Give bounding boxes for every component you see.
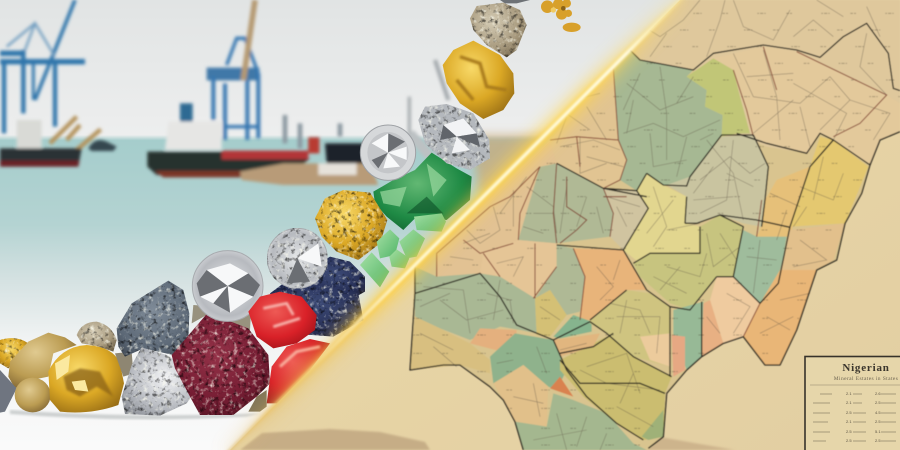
gold flakes bbox=[541, 0, 581, 32]
legend title: Nigerian bbox=[842, 362, 890, 374]
silver wedge: left edge bbox=[0, 370, 17, 413]
region: lime bbox=[687, 58, 750, 137]
legend rows: 2.1 bbox=[846, 400, 852, 405]
region: pale yellow bbox=[623, 173, 700, 263]
region: pink bbox=[672, 335, 685, 377]
borders: dark major bbox=[410, 23, 900, 450]
borders: red-brown bbox=[437, 47, 887, 337]
glow: wide halo bbox=[227, 0, 683, 450]
region: yellow east bbox=[790, 137, 868, 227]
stone: maroon bbox=[172, 314, 270, 415]
diagonal golden glow bbox=[227, 0, 683, 450]
stone: grey sliver top bbox=[500, 0, 530, 3]
diamond: speckled upper bbox=[418, 104, 490, 170]
region: orange centre bbox=[573, 248, 647, 320]
legend rows: 4.5 bbox=[875, 410, 881, 415]
legend rows: 2.5 bbox=[846, 410, 852, 415]
gold nugget: large bbox=[48, 345, 124, 412]
region: yellow green bbox=[590, 290, 670, 367]
stone: small brown bbox=[77, 322, 117, 352]
hills: bottom sepia bbox=[240, 429, 735, 450]
legend divider bbox=[810, 384, 900, 386]
ship: centre hull bbox=[147, 103, 378, 185]
map of regions bbox=[410, 0, 900, 450]
region: green west bbox=[415, 267, 537, 340]
legend rows bbox=[813, 391, 896, 443]
legend rows: 5.1 bbox=[875, 429, 881, 434]
emerald crystal: small bbox=[389, 249, 409, 268]
legend rows: 2.1 bbox=[846, 391, 852, 396]
emerald crystal: bottom bbox=[360, 252, 389, 287]
crane: centre blue and tan bbox=[207, 0, 260, 140]
region: teal east bbox=[733, 230, 787, 303]
region: teal patch bbox=[553, 315, 592, 338]
region: orange south-west bbox=[470, 328, 516, 350]
tan nugget: left bbox=[8, 333, 77, 388]
minerals: upper group bbox=[267, 0, 581, 288]
region: olive centre bbox=[633, 215, 743, 310]
region: olive south bbox=[560, 333, 672, 440]
region: green north bbox=[613, 50, 723, 191]
region: green south bbox=[515, 393, 647, 450]
legend rows: 2.5 bbox=[846, 438, 852, 443]
gold nugget: lower bbox=[315, 190, 387, 260]
legend rows: 2.6 bbox=[875, 391, 881, 396]
minerals: lower group bbox=[0, 251, 330, 419]
region: tan north-west bbox=[568, 148, 576, 162]
stone: red upper bbox=[248, 292, 317, 348]
gold nugget: top bbox=[443, 41, 514, 119]
ship: left hull bbox=[0, 117, 117, 167]
legend rows: 2.5 bbox=[846, 429, 852, 434]
glow: mid band bbox=[227, 0, 683, 450]
haze: warm distant shore bbox=[470, 129, 542, 193]
region: tan coast bbox=[494, 365, 548, 422]
legend rows: 2.5 bbox=[875, 400, 881, 405]
navy rocks bbox=[270, 257, 365, 337]
paper bbox=[230, 0, 900, 450]
legend rows: 2.5 bbox=[875, 419, 881, 424]
map base bbox=[412, 71, 870, 450]
diamond: top of navy bbox=[267, 228, 327, 288]
region: teal south bbox=[673, 302, 703, 370]
region: amber bbox=[757, 167, 810, 237]
stone: blue grey bbox=[117, 281, 189, 357]
region: grey beige bbox=[603, 188, 648, 250]
nugget: small round bbox=[15, 378, 51, 412]
stone: silver white bbox=[122, 347, 201, 416]
region: peach north-west bbox=[438, 152, 556, 276]
region: peach centre-west bbox=[480, 240, 557, 298]
region: yellow small bbox=[535, 290, 567, 337]
roads: thin network bbox=[420, 0, 890, 450]
region: red-orange bbox=[550, 377, 573, 397]
stone: tan top bbox=[470, 3, 527, 57]
vintage map panel bbox=[230, 0, 900, 450]
region: green coast bbox=[642, 410, 663, 440]
region: peach bbox=[710, 277, 760, 343]
stone: under diamond bbox=[192, 300, 252, 330]
region: orange delta bbox=[553, 333, 600, 357]
region: grey tan bbox=[667, 135, 768, 227]
legend frame bbox=[805, 356, 900, 450]
region: sage centre bbox=[535, 245, 585, 315]
inset legend table bbox=[805, 356, 900, 450]
stone: behind silver bbox=[115, 352, 133, 377]
region: salmon bbox=[702, 300, 723, 357]
region: pale peach bbox=[640, 333, 670, 367]
legend subtitle: Mineral Estates in States bbox=[834, 376, 898, 382]
region: orange south-east bbox=[743, 270, 817, 365]
region: north-east peach bbox=[713, 47, 900, 165]
diamond: large low bbox=[192, 251, 263, 321]
legend rows: 2.5 bbox=[875, 438, 881, 443]
diamond: round middle bbox=[360, 125, 416, 180]
legend rows: 2.1 bbox=[846, 419, 852, 424]
emerald: large bbox=[373, 153, 472, 230]
region: khaki south-west bbox=[410, 317, 490, 373]
crane: left blue bbox=[0, 0, 85, 133]
stone: red lower bbox=[267, 339, 330, 403]
emerald crystal: top right bbox=[414, 213, 446, 232]
floor shadow bbox=[10, 410, 260, 419]
region: northern tan bbox=[635, 0, 900, 150]
emerald crystal: centre bbox=[377, 229, 399, 258]
map label texture bbox=[413, 13, 900, 445]
distant cranes bbox=[409, 60, 448, 160]
glow: bright core bbox=[227, 0, 683, 450]
region: green delta bbox=[490, 333, 567, 390]
port scene: cranes and ships bbox=[0, 0, 448, 185]
stone: dark base bbox=[248, 390, 267, 412]
region: sage west bbox=[518, 163, 613, 243]
emerald crystal: right bbox=[399, 229, 425, 258]
gold nugget: far left bbox=[0, 338, 28, 368]
region: tan east bbox=[780, 223, 845, 270]
